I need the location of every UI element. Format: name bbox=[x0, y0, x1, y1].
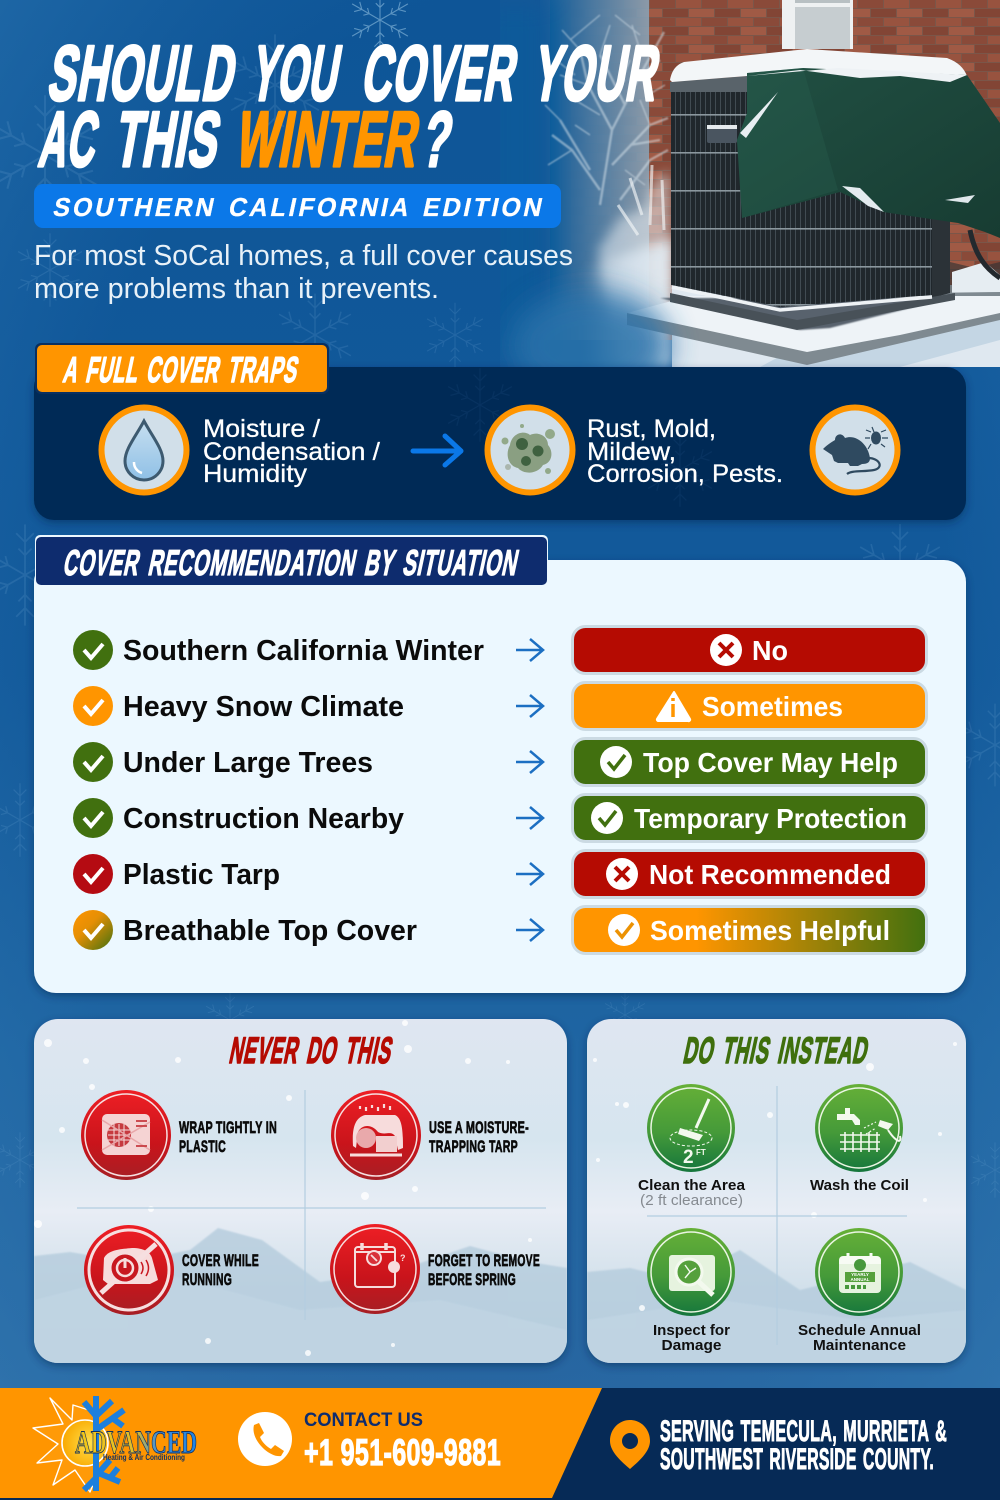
rust text: Corrosion, Pests. bbox=[587, 460, 783, 488]
icon: mold bbox=[488, 408, 572, 492]
text: moisture tarp bbox=[429, 1118, 529, 1156]
photo: air conditioner with tarp in snow bbox=[502, 0, 1000, 367]
row: southern california winter: Southern California Winter bbox=[123, 635, 484, 667]
heading tab bbox=[35, 343, 329, 394]
panel: do this instead bbox=[587, 1019, 966, 1363]
text: moisture tarp: USE A MOISTURE- bbox=[429, 1118, 529, 1137]
row: heavy snow climate bbox=[73, 682, 926, 730]
title: ? bbox=[417, 96, 459, 183]
text: forget to remove: FORGET TO REMOVE bbox=[428, 1251, 540, 1270]
heading tab: A FULL COVER TRAPS bbox=[60, 349, 303, 390]
item: moisture tarp bbox=[331, 1090, 421, 1180]
row: under large trees bbox=[73, 738, 926, 786]
row: breathable top cover: Sometimes Helpful bbox=[650, 915, 890, 946]
intro text bbox=[34, 240, 573, 305]
title: SHOULD bbox=[43, 30, 244, 117]
heading tab: COVER RECOMMENDATION BY SITUATION bbox=[60, 542, 523, 583]
title bbox=[34, 30, 667, 183]
logo: Heating & Air Conditioning bbox=[103, 1452, 185, 1462]
photo AC unit bbox=[627, 49, 1000, 367]
photo concrete pad bbox=[627, 292, 1000, 365]
icon: mouse and bug bbox=[812, 408, 898, 492]
moisture text bbox=[203, 415, 380, 488]
item: schedule annual maintenance bbox=[815, 1228, 903, 1316]
contact bbox=[304, 1410, 501, 1473]
icon: water drop bbox=[102, 408, 186, 492]
text: inspect for damage: Inspect for bbox=[653, 1322, 730, 1339]
contact: CONTACT US bbox=[304, 1410, 423, 1431]
text: forget to remove bbox=[428, 1251, 540, 1289]
service area bbox=[660, 1415, 947, 1476]
row: heavy snow climate: Sometimes bbox=[702, 691, 843, 722]
text: forget to remove: BEFORE SPRING bbox=[428, 1270, 516, 1289]
row: under large trees: Top Cover May Help bbox=[643, 747, 898, 778]
title: YOUR bbox=[528, 30, 667, 117]
row: plastic tarp bbox=[73, 850, 926, 898]
text: clean the area: (2 ft clearance) bbox=[640, 1192, 743, 1209]
text: wrap tightly: WRAP TIGHTLY IN bbox=[179, 1118, 277, 1137]
intro text: more problems than it prevents. bbox=[34, 273, 439, 305]
item: wash the coil bbox=[815, 1084, 903, 1172]
row: under large trees: Under Large Trees bbox=[123, 747, 373, 779]
item: forget to remove: ? bbox=[400, 1253, 406, 1263]
row: southern california winter bbox=[73, 626, 926, 674]
text: cover while running bbox=[182, 1251, 259, 1289]
title: THIS bbox=[110, 96, 228, 183]
row: southern california winter: No bbox=[752, 635, 788, 666]
footer bbox=[0, 1388, 1000, 1500]
photo window bbox=[782, 0, 853, 49]
edition banner bbox=[34, 184, 561, 228]
item: clean the area: 2 bbox=[683, 1147, 694, 1168]
text: wash the coil: Wash the Coil bbox=[810, 1177, 909, 1194]
panel: a full cover traps bbox=[34, 343, 966, 520]
intro text: For most SoCal homes, a full cover causes bbox=[34, 240, 573, 272]
text: cover while running: RUNNING bbox=[182, 1270, 232, 1289]
photo snowy bush and ground bbox=[598, 172, 672, 325]
text: clean the area bbox=[638, 1177, 746, 1209]
edition banner: SOUTHERN CALIFORNIA EDITION bbox=[51, 192, 548, 222]
logo bbox=[33, 1396, 197, 1492]
row: breathable top cover bbox=[73, 906, 926, 954]
photo snowy branches bbox=[545, 15, 668, 205]
row: construction nearby: Temporary Protection bbox=[634, 803, 907, 834]
row: plastic tarp: Plastic Tarp bbox=[123, 859, 280, 891]
heading: NEVER DO THIS bbox=[226, 1029, 397, 1071]
text: schedule annual maintenance bbox=[798, 1322, 921, 1354]
text: wrap tightly bbox=[179, 1118, 277, 1156]
text: schedule annual maintenance: Schedule Annual bbox=[798, 1322, 921, 1339]
moisture text: Moisture / bbox=[203, 415, 320, 443]
title: YOU bbox=[246, 30, 348, 117]
item: inspect for damage bbox=[647, 1228, 735, 1316]
title: WINTER bbox=[231, 96, 427, 183]
arrow bbox=[413, 436, 461, 465]
item: clean the area: FT bbox=[696, 1148, 706, 1157]
row: heavy snow climate: Heavy Snow Climate bbox=[123, 691, 404, 723]
heading tab bbox=[35, 535, 548, 586]
row: construction nearby: Construction Nearby bbox=[123, 803, 404, 835]
title: COVER bbox=[357, 30, 525, 117]
text: inspect for damage bbox=[653, 1322, 730, 1354]
row: breathable top cover: Breathable Top Cover bbox=[123, 915, 417, 947]
text: wrap tightly: PLASTIC bbox=[179, 1137, 226, 1156]
photo unit badge bbox=[707, 125, 737, 143]
icon: location pin bbox=[610, 1420, 650, 1469]
contact: +1 951-609-9881 bbox=[304, 1432, 501, 1473]
item: forget to remove bbox=[330, 1224, 420, 1314]
row: plastic tarp: Not Recommended bbox=[649, 859, 891, 890]
panel: never do this bbox=[34, 1019, 567, 1363]
text: schedule annual maintenance: Maintenance bbox=[813, 1337, 906, 1354]
icon: phone bbox=[238, 1412, 292, 1466]
rust text: Rust, Mold, bbox=[587, 415, 716, 443]
moisture text: Humidity bbox=[203, 460, 308, 488]
text: moisture tarp: TRAPPING TARP bbox=[429, 1137, 518, 1156]
photo lower-left blue fade bbox=[510, 290, 670, 400]
item: wrap tightly bbox=[81, 1090, 171, 1180]
text: inspect for damage: Damage bbox=[662, 1337, 722, 1354]
rust text bbox=[587, 415, 783, 488]
panel: cover recommendation by situation bbox=[34, 535, 966, 993]
rust text: Mildew, bbox=[587, 438, 676, 466]
photo snow cap bbox=[670, 49, 967, 82]
item: cover while running bbox=[84, 1225, 174, 1315]
text: clean the area: Clean the Area bbox=[638, 1177, 746, 1194]
photo green tarp bbox=[737, 68, 1000, 238]
item: schedule annual maintenance: ANNUAL bbox=[850, 1277, 870, 1282]
moisture text: Condensation / bbox=[203, 438, 380, 466]
title: AC bbox=[34, 96, 106, 183]
item: clean the area bbox=[647, 1084, 735, 1172]
item: schedule annual maintenance: YEARLY bbox=[851, 1272, 869, 1277]
text: cover while running: COVER WHILE bbox=[182, 1251, 259, 1270]
row: construction nearby bbox=[73, 794, 926, 842]
logo: ADVANCED bbox=[75, 1425, 197, 1461]
